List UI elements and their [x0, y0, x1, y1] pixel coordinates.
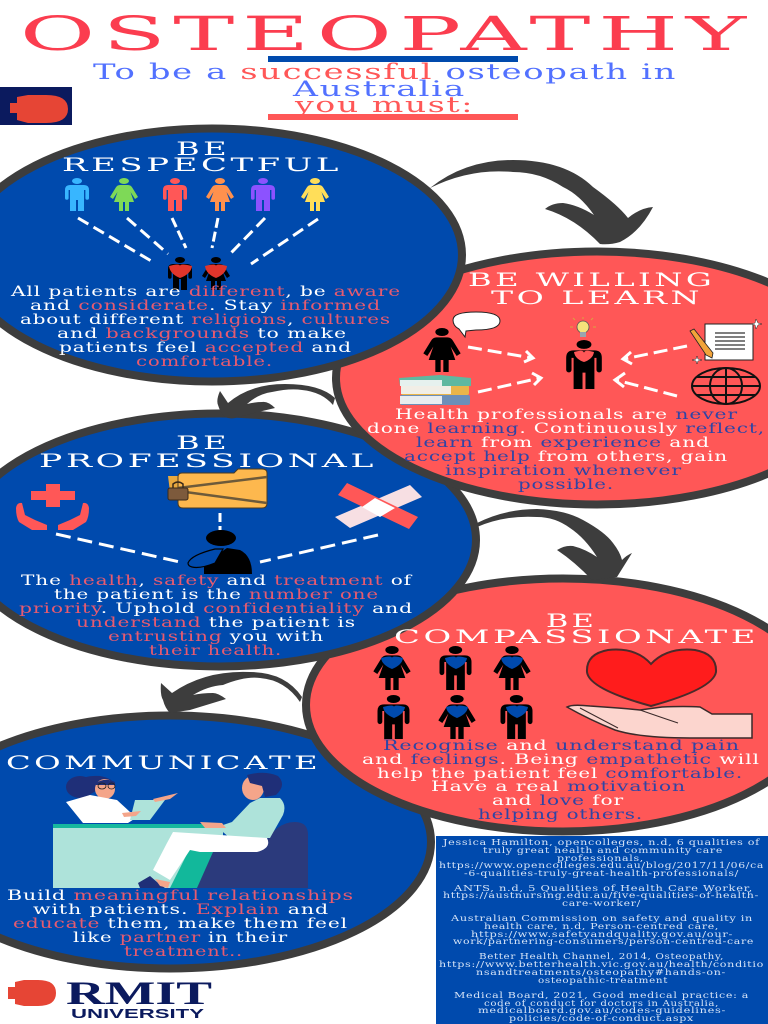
heading: be compassionate: COMPASSIONATE [394, 626, 759, 648]
references panel: policies/code-of-conduct.aspx [509, 1014, 694, 1023]
heading: be compassionate: BE [546, 610, 597, 632]
body text: Recognise and understand pain [383, 738, 740, 754]
body text: comfortable. [136, 354, 273, 370]
body text: educate them, make them feel [13, 916, 348, 932]
references panel: care-worker/ [562, 899, 641, 908]
icon: hands and cross [16, 484, 89, 530]
body text: with patients. Explain and [33, 902, 329, 918]
references panel: code of conduct for doctors in Australia, [484, 999, 719, 1008]
body text: patients feel accepted and [59, 340, 352, 356]
body text: treatment.. [124, 944, 243, 960]
body text [362, 738, 760, 823]
references panel: professionals, [557, 854, 644, 863]
icon: patient with sling [188, 530, 252, 574]
panel: be willing to learn [336, 252, 768, 504]
heading [468, 269, 715, 309]
arrow: professional to compassionate [477, 509, 632, 580]
dashed connectors [78, 218, 318, 264]
body text: inspiration whenever [445, 463, 682, 479]
references panel: https://www.opencolleges.edu.au/blog/2017/11/06/ca [439, 861, 764, 870]
heading [39, 432, 377, 472]
panel: be professional [0, 414, 476, 666]
icon: woman with speech bubble [423, 312, 500, 372]
dashed connectors [56, 513, 378, 562]
body text: Have a real motivation [431, 779, 686, 795]
body text: Health professionals are never [395, 407, 738, 423]
references panel: https://www.betterhealth.vic.gov.au/health/conditio [439, 960, 764, 969]
body text: and considerate . Stay informed [30, 298, 381, 314]
icon: open hand [567, 705, 752, 738]
heading: BE [176, 432, 230, 454]
icon: heart [587, 650, 716, 706]
heading: BE WILLING [468, 269, 715, 291]
references panel: nsandtreatments/osteopathy#hands-on- [476, 968, 726, 977]
heading: PROFESSIONAL [39, 450, 377, 472]
subtitle [93, 60, 677, 117]
icon: central pair with hearts [168, 257, 230, 290]
body text [19, 573, 414, 659]
references panel: -6-qualities-truly-great-health-professionals/ [464, 869, 739, 878]
RMIT logo: UNIVERSITY [71, 1006, 205, 1021]
logo box [0, 87, 72, 125]
references panel: ANTS, n.d, 5 Qualities of Health Care Worker, [453, 884, 753, 893]
subtitle: Australia [291, 77, 466, 101]
body text [367, 407, 765, 493]
body text: The health , safety and treatment of [21, 573, 414, 589]
icon: learner with heart and light bulb [566, 317, 602, 389]
body text: learn from experience and [416, 435, 710, 451]
body text: and love for [492, 793, 624, 809]
subtitle: To be a successful osteopath in [93, 60, 677, 84]
heading: COMMUNICATE [6, 752, 321, 774]
body text: help the patient feel comfortable. [377, 766, 743, 782]
red subtitle underline [268, 114, 518, 120]
body text: and feelings . Being empathetic will [362, 752, 760, 768]
body text: priority . Uphold confidentiality and [19, 601, 413, 617]
body text: Build meaningful relationships [7, 888, 354, 904]
panel: be respectful [0, 128, 462, 382]
references panel: truly great health and community care [483, 846, 723, 855]
body text: understand the patient is [76, 615, 356, 631]
body text: done learning . Continuously reflect, [367, 421, 765, 437]
blue title underline [268, 56, 518, 62]
heading: be compassionate [394, 610, 759, 648]
icon: group of six people with hearts [373, 646, 532, 739]
arrow: willing to professional [217, 384, 335, 418]
dashed arrows [468, 346, 687, 396]
references panel [436, 836, 768, 1024]
references panel: Better Health Channel, 2014, Osteopathy, [479, 952, 724, 961]
body text [7, 888, 354, 960]
references panel: Australian Commission on safety and quality in [450, 914, 753, 923]
RMIT logo [8, 976, 212, 1021]
subtitle: you must: [293, 93, 474, 117]
body text: the patient is the number one [54, 587, 379, 603]
panel: communicate [0, 716, 431, 968]
body text: possible. [518, 477, 614, 493]
heading: BE [176, 138, 230, 160]
references panel: Jessica Hamilton, opencolleges, n.d, 6 qualities of [442, 838, 761, 847]
body text [10, 284, 401, 370]
body text: and backgrounds to make [57, 326, 347, 342]
body text: their health. [149, 643, 282, 659]
references panel: medicalboard.gov.au/codes-guidelines- [478, 1006, 726, 1015]
body text: All patients are different , be aware [10, 284, 401, 300]
title: OSTEOPATHY [20, 7, 754, 62]
arrow: compassionate to communicate [161, 672, 302, 713]
body text: about different religions , cultures [20, 312, 391, 328]
heading: RESPECTFUL [62, 154, 342, 176]
body text: entrusting you with [108, 629, 324, 645]
references panel: osteopathic-treatment [538, 976, 668, 985]
icon: globe [692, 368, 760, 404]
references panel: https://www.safetyandquality.gov.au/our- [471, 930, 733, 939]
arrow: respectful to willing [430, 160, 653, 244]
panel: be compassionate [306, 578, 768, 832]
arrow heads [524, 351, 632, 387]
icon: bandage [335, 483, 422, 529]
RMIT logo: RMIT [66, 976, 212, 1012]
icon: paper and pencil [690, 319, 762, 364]
body text: accept help from others, gain [404, 449, 728, 465]
icon: books [399, 375, 471, 405]
icon: locked folder [168, 469, 267, 508]
heading [62, 138, 342, 176]
illustration: doctor and patient [53, 773, 308, 888]
references panel: health care, n.d, Person-centred care, [484, 922, 719, 931]
icon row: six coloured people [65, 178, 329, 211]
references panel: https://austnursing.edu.au/five-qualities-of-health- [443, 891, 759, 900]
heading: TO LEARN [491, 287, 703, 309]
references panel: Medical Board, 2021, Good medical practice: a [454, 991, 749, 1000]
references panel: work/partnering-consumers/person-centred-care [453, 937, 754, 946]
body text: like partner in their [73, 930, 288, 946]
body text: helping others. [478, 807, 643, 823]
